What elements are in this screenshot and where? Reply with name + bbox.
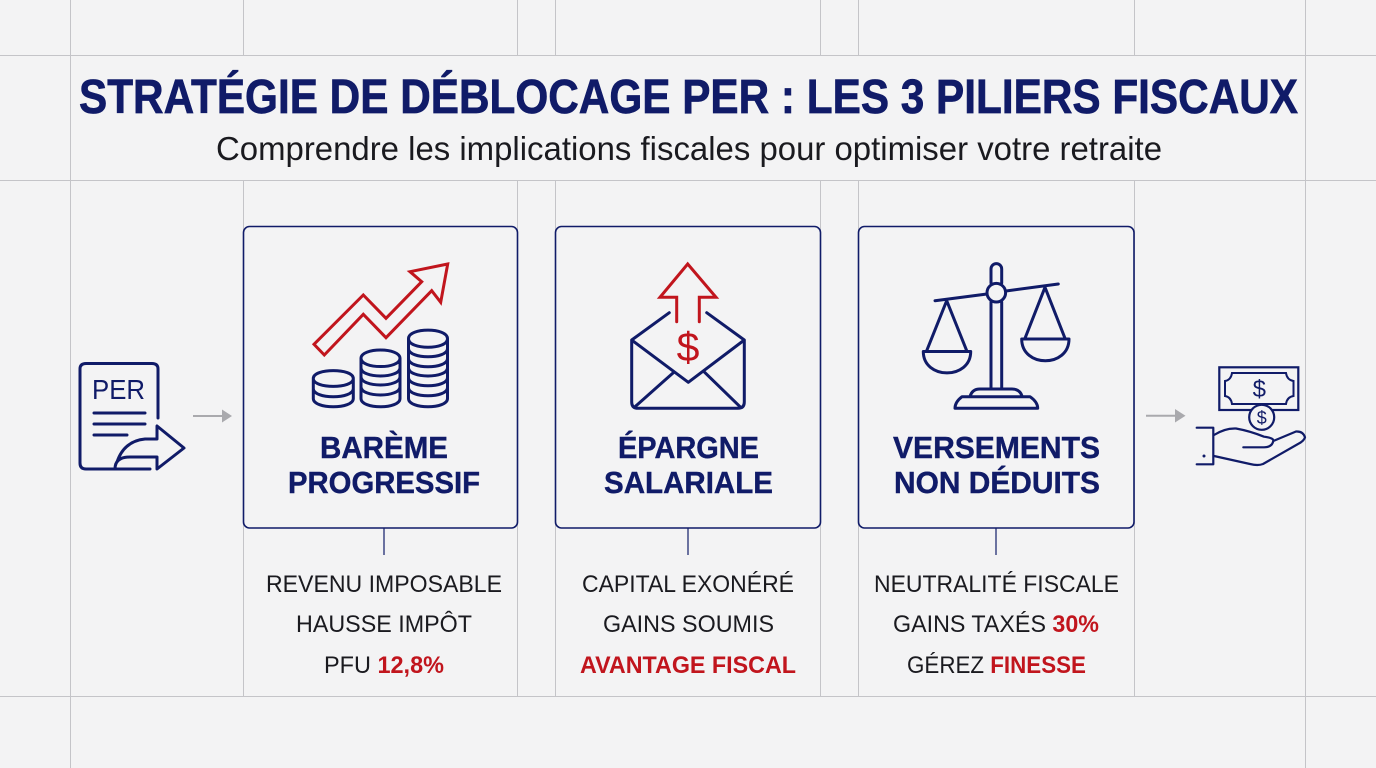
text block: épargne details [580, 571, 796, 679]
panel: versements non déduits [858, 226, 1134, 528]
text block: versements details: GAINS TAXÉS 30% [893, 611, 1099, 638]
icon: balance scale [923, 264, 1069, 408]
icon: rising arrow and coins [313, 264, 448, 407]
icon: envelope with arrow: $ [677, 324, 700, 370]
panel: barème progressif [244, 226, 518, 528]
heading: SALARIALE [604, 465, 773, 500]
connector [995, 528, 997, 555]
text block: versements details [874, 571, 1119, 679]
icon: banknote and hand: $ [1253, 376, 1266, 403]
text block: versements details: GÉREZ FINESSE [907, 652, 1086, 679]
heading [604, 430, 773, 500]
heading: PROGRESSIF [288, 465, 480, 500]
heading [288, 430, 480, 500]
heading: NON DÉDUITS [894, 465, 1100, 500]
connector [687, 528, 689, 555]
text block: barème details: REVENU IMPOSABLE [266, 571, 502, 598]
text block: épargne details: AVANTAGE FISCAL [580, 652, 796, 679]
text block: barème details [266, 571, 502, 679]
heading: VERSEMENTS [893, 430, 1100, 465]
text block: épargne details: GAINS SOUMIS [603, 611, 774, 638]
text block: versements details: NEUTRALITÉ FISCALE [874, 571, 1119, 598]
text block: barème details: HAUSSE IMPÔT [296, 610, 472, 638]
icon: PER document: PER [92, 374, 145, 405]
panel: épargne salariale [556, 226, 820, 528]
icon: banknote and hand: $ [1257, 408, 1267, 428]
arrow: document to pillars [193, 410, 232, 422]
heading: BARÈME [320, 430, 448, 465]
connector [383, 528, 385, 555]
text block: épargne details: CAPITAL EXONÉRÉ [582, 571, 794, 598]
heading [893, 430, 1100, 500]
heading: ÉPARGNE [618, 430, 759, 465]
text block: barème details: PFU 12,8% [324, 652, 444, 679]
icon: PER document [80, 364, 184, 469]
icon: banknote and hand [1197, 367, 1305, 465]
subtitle: Comprendre les implications fiscales pour optimiser votre retraite [216, 130, 1162, 167]
arrow: pillars to payout [1146, 409, 1186, 422]
icon: envelope with arrow [632, 264, 744, 408]
